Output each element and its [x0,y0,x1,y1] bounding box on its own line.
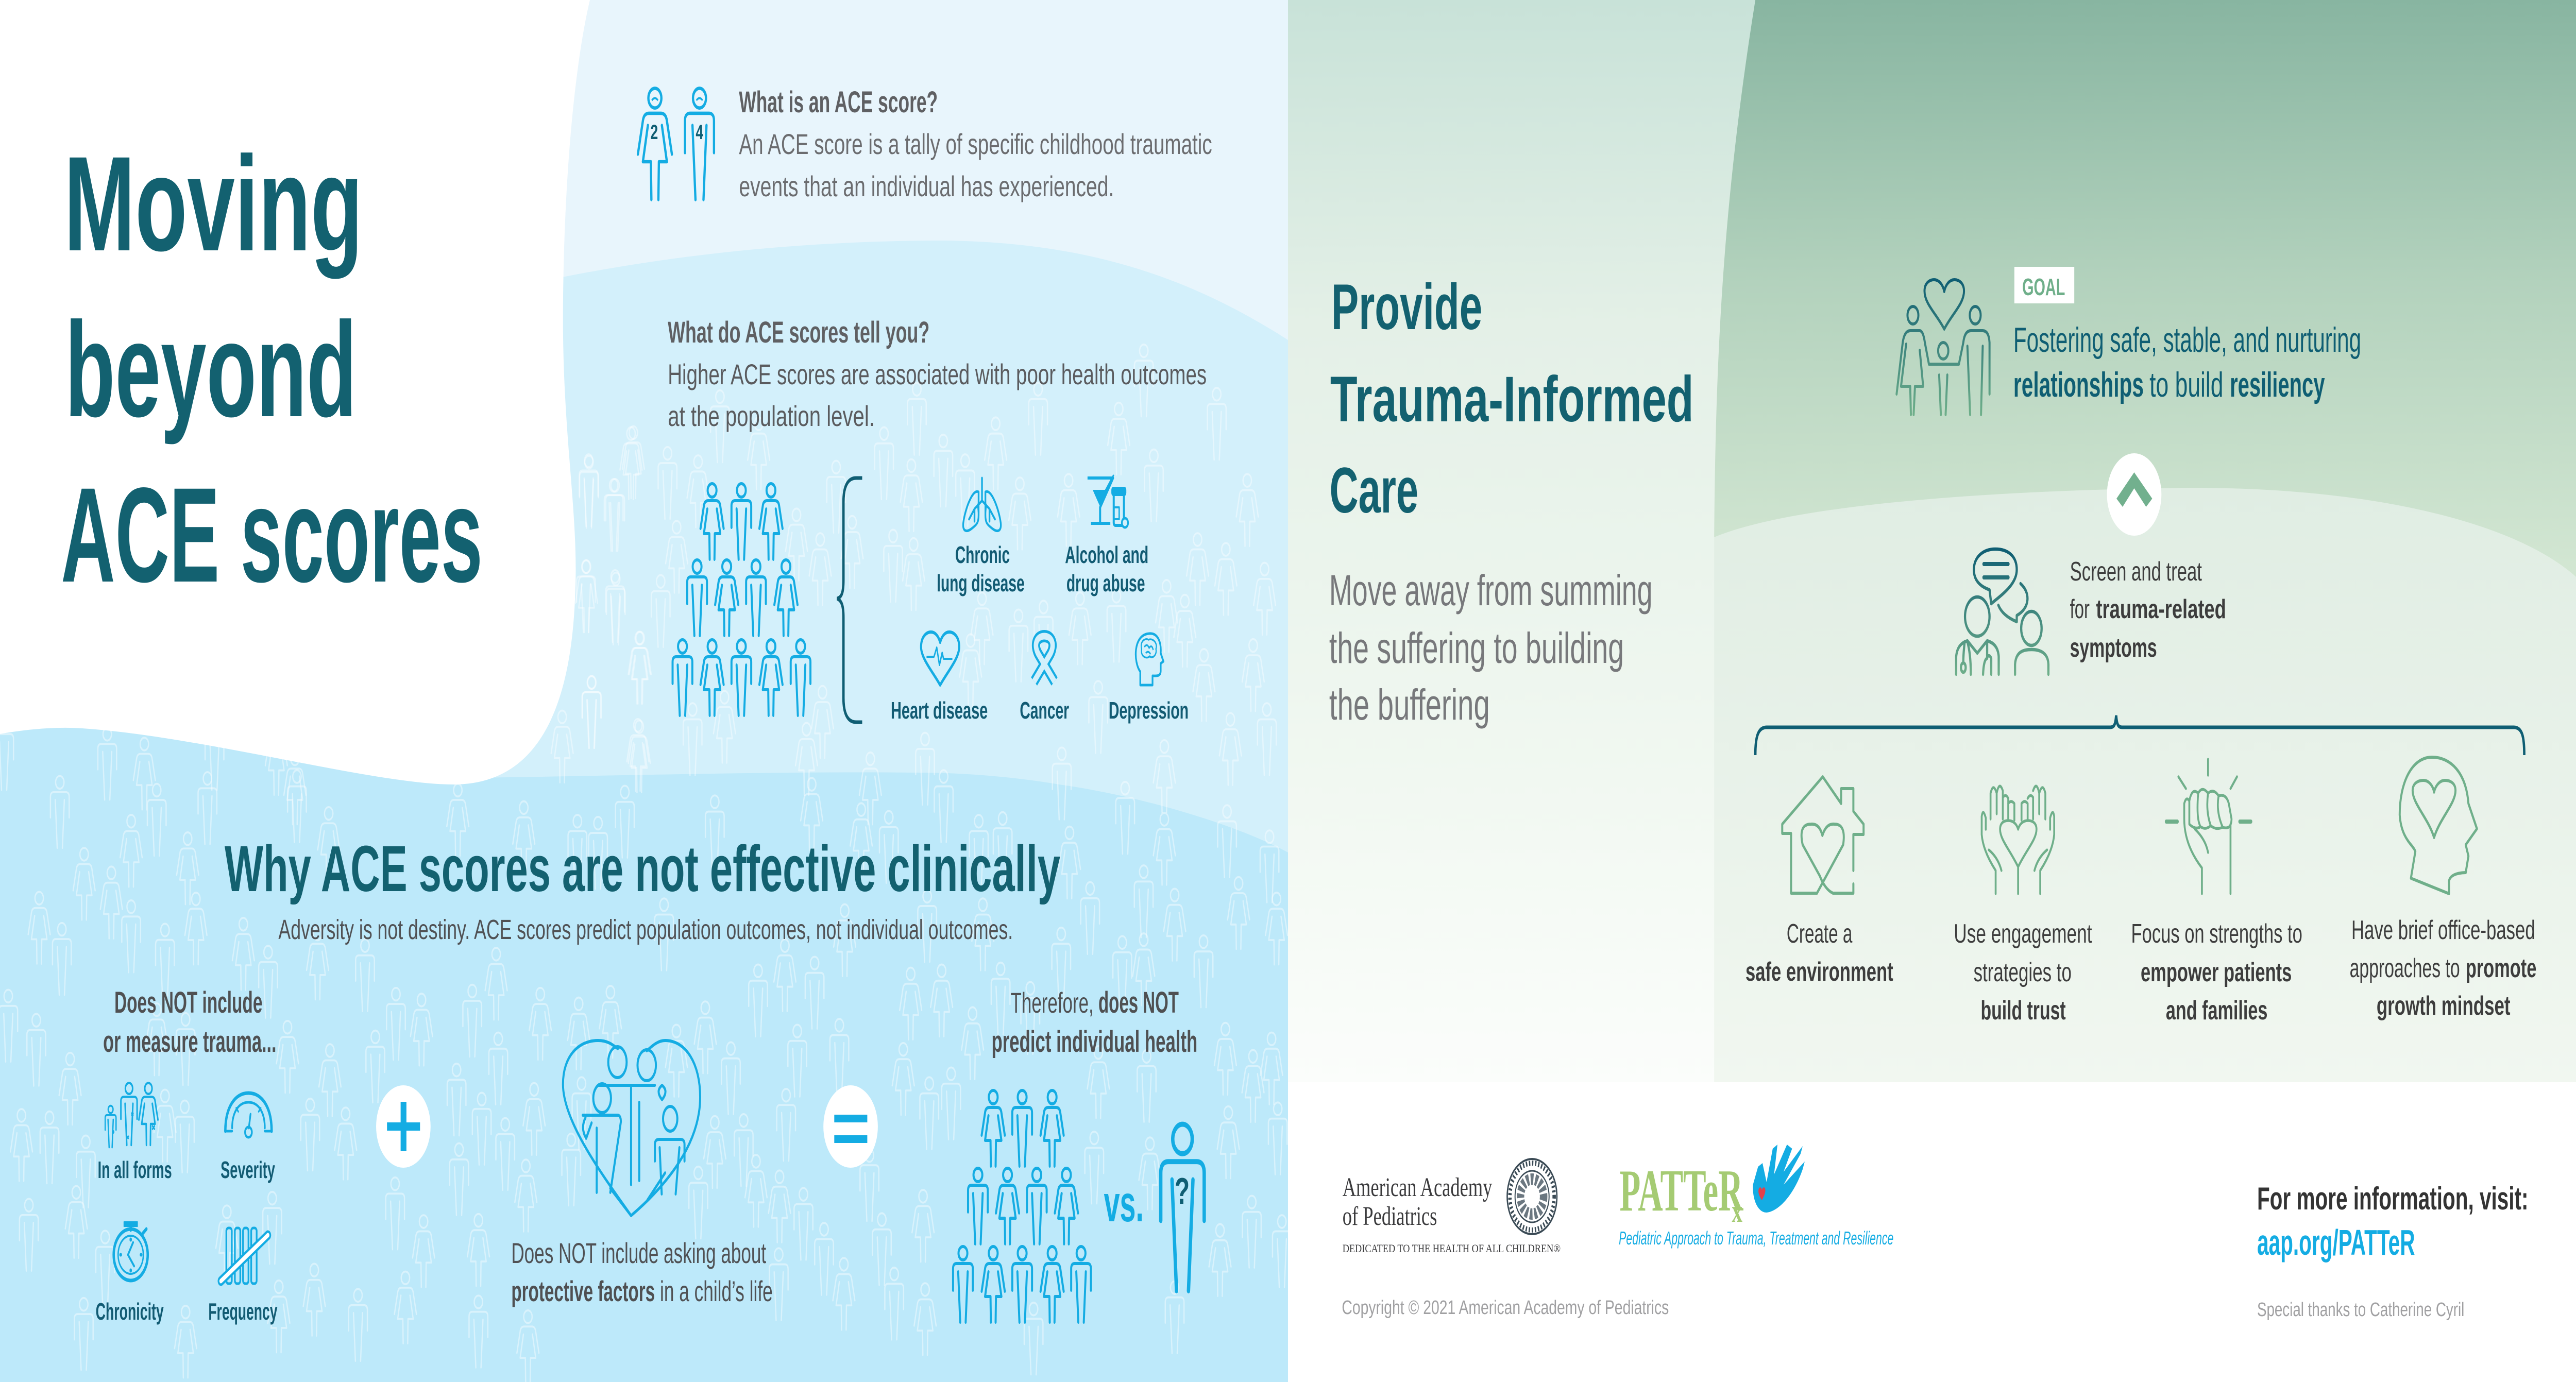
text block: create a safe environment: Create a [1787,919,1853,949]
text block: focus on strengths: Focus on strengths to [2131,919,2302,949]
logo: American Academy of Pediatrics: DEDICATED TO THE HEALTH OF ALL CHILDREN® [1343,1242,1561,1255]
icon: population group versus individual [953,1090,1091,1322]
icon: chronicity stopwatch [114,1222,148,1281]
labels: health outcomes: Heart disease [891,698,988,724]
logo: PATTeR [1619,1145,1893,1249]
text block: move away from summing: the buffering [1329,681,1490,729]
logo: American Academy of Pediatrics: American Academy [1343,1172,1492,1202]
label: chronicity: Chronicity [96,1299,164,1325]
text block: screen and treat: for [2070,594,2090,624]
text block: goal statement: Fostering safe, stable, and nurturing [2013,321,2361,360]
icon: two people with ACE scores [638,88,714,200]
icon: plus circle [376,1085,431,1168]
text block: goal statement: resiliency [2230,366,2325,404]
icon: head with brain [1136,634,1163,685]
icon: two people with ACE scores: 4 [696,121,703,144]
icon: heart with ECG [921,632,959,685]
icon: house with heart [1782,777,1863,893]
text block: focus on strengths: and families [2166,996,2267,1026]
logo: PATTeR: Pediatric Approach to Trauma, Treatment and Resilience [1619,1228,1893,1249]
text block: does not include or measure trauma [103,986,276,1059]
panel: white title area [0,0,590,784]
icon: lungs [963,478,1001,531]
icon: family inside heart [563,1040,700,1216]
icon: severity gauge [225,1093,272,1137]
icon: two people with ACE scores: 2 [650,121,658,144]
text block: what do ACE scores tell you [668,316,1207,433]
label: in all forms: In all forms [98,1157,172,1184]
title: Moving [64,129,363,280]
badge: goal [2014,267,2074,303]
labels: health outcomes: lung disease [937,571,1025,597]
text block: move away from summing [1329,567,1653,729]
text block: focus on strengths [2131,919,2302,1026]
text block: therefore does not predict individual health: predict individual health [992,1026,1197,1059]
text block: goal statement [2013,321,2361,404]
subheading: adversity is not destiny: Adversity is not destiny. ACE scores predict population outcomes, not individual outcomes. [278,914,1013,945]
credit: special thanks: Special thanks to Catherine Cyril [2257,1299,2464,1320]
text block: screen and treat: symptoms [2070,633,2157,663]
text block: for more information [2257,1181,2529,1262]
icon: doctor and patient talking [1956,549,2048,674]
text block: growth mindset: promote [2466,953,2536,983]
icon: head with heart [2400,757,2477,894]
title [61,129,483,611]
brace: four approaches [1755,715,2524,755]
text block: focus on strengths: empower patients [2141,958,2292,987]
icon: population group [672,484,810,715]
text block: goal statement: to build [2149,366,2224,404]
icon: martini and pill bottle [1088,475,1128,527]
brace: population to outcomes [837,478,862,722]
badge: goal: GOAL [2022,275,2065,301]
logo: American Academy of Pediatrics [1343,1159,1561,1255]
heading: provide trauma-informed care [1330,271,1694,526]
text block: growth mindset: approaches to [2350,953,2460,983]
label: vs: vs. [1104,1174,1144,1232]
text block: for more information: aap.org/PATTeR [2257,1222,2415,1262]
text block: protective factors: protective factors [511,1275,655,1308]
text block: screen and treat: Screen and treat [2070,557,2202,587]
text block: screen and treat: trauma-related [2096,594,2226,624]
heading: why ACE scores are not effective: Why ACE scores are not effective clinically [225,832,1060,905]
text block: therefore does not predict individual health [992,986,1197,1059]
text block: growth mindset: growth mindset [2377,991,2511,1021]
icon: frequency tally [221,1228,268,1284]
heading: provide trauma-informed care: Care [1330,455,1418,526]
text block: does not include or measure trauma: or measure trauma... [103,1026,276,1059]
text block: growth mindset [2350,915,2536,1021]
text block: move away from summing: Move away from summing [1329,567,1653,615]
icon: hands holding heart [1981,786,2054,894]
text block: protective factors: Does NOT include asking about [511,1237,766,1270]
icon: all forms family with marks [105,1083,158,1148]
copyright: Copyright © 2021 American Academy of Pediatrics [1342,1296,1669,1318]
text block: engagement strategies [1954,919,2092,1026]
text block: growth mindset: Have brief office-based [2351,915,2535,945]
labels: health outcomes: Alcohol and [1065,542,1148,569]
text block: create a safe environment: safe environment [1745,957,1893,987]
labels: health outcomes: Cancer [1020,698,1069,724]
text block: what is an ACE score [739,86,1212,203]
icon: raised fist with rays [2166,759,2251,894]
labels: health outcomes: Chronic [955,542,1010,569]
background pattern: crowd of people [0,345,1291,1382]
text block: engagement strategies: strategies to [1974,958,2072,987]
icon: chevron circle [2107,453,2161,536]
text block: for more information: For more information, visit: [2257,1181,2529,1217]
icon: equals circle [823,1085,878,1168]
text block: what is an ACE score: An ACE score is a tally of specific childhood traumatic [739,128,1212,161]
labels: health outcomes: Depression [1109,698,1189,724]
text block: engagement strategies: build trust [1980,996,2066,1026]
text block: protective factors [511,1237,773,1308]
logo: American Academy of Pediatrics: of Pediatrics [1343,1201,1437,1231]
text block: move away from summing: the suffering to building [1329,625,1624,673]
text block: what do ACE scores tell you: at the population level. [668,400,875,433]
title: beyond [65,295,357,446]
label: severity: Severity [221,1157,275,1184]
text block: what do ACE scores tell you: Higher ACE scores are associated with poor health outcomes [668,359,1207,391]
labels: health outcomes [891,542,1189,724]
panel: left blue wave background [0,0,1288,1382]
text block: goal statement: relationships [2013,366,2144,404]
title: ACE scores [61,460,483,611]
text block: what is an ACE score: events that an individual has experienced. [739,170,1114,203]
text block: what do ACE scores tell you: What do ACE scores tell you? [668,316,929,349]
panel: right green background [1288,0,2576,1082]
icon: individual with question mark: ? [1175,1170,1190,1212]
text block: therefore does not predict individual health: Therefore, [1011,987,1094,1019]
heading: provide trauma-informed care: Provide [1331,271,1482,343]
text block: create a safe environment [1745,919,1893,987]
icon: individual with question mark [1161,1124,1204,1291]
icon: awareness ribbon [1034,636,1055,681]
heading: provide trauma-informed care: Trauma-Informed [1330,364,1694,435]
text block: therefore does not predict individual health: does NOT [1098,986,1179,1019]
text block: what is an ACE score: What is an ACE score? [739,86,938,119]
text block: protective factors: in a child’s life [660,1275,773,1308]
logo: PATTeR: PATTeR [1619,1158,1743,1224]
labels: health outcomes: drug abuse [1066,571,1145,597]
logo: PATTeR: x [1732,1194,1742,1229]
label: frequency: Frequency [208,1299,278,1325]
text block: does not include or measure trauma: Does NOT include [114,986,262,1019]
icon: family with heart [1896,280,1990,415]
text block: engagement strategies: Use engagement [1954,919,2092,949]
text block: screen and treat [2070,557,2226,663]
